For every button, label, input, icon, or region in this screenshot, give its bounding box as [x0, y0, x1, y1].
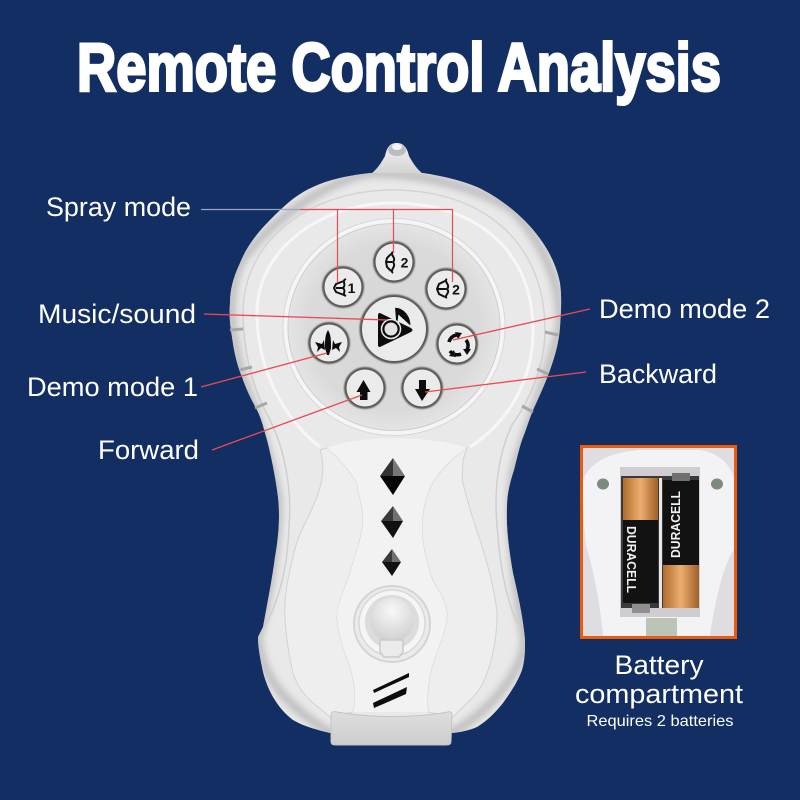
photo: latch [646, 618, 677, 636]
right grip panel [422, 448, 497, 717]
caption line 1: Battery [614, 650, 704, 680]
button: spray 1 [322, 266, 364, 308]
photo: left battery [623, 478, 658, 613]
callout lines: spray mode [201, 210, 452, 282]
callout line: demo mode 1 [201, 353, 327, 387]
battery compartment photo [582, 446, 736, 638]
speed diamonds [380, 458, 405, 576]
photo: right battery: DURACELL [668, 491, 683, 558]
photo: screw hole right [711, 478, 723, 490]
button panel [283, 218, 505, 436]
remote antenna nub [368, 143, 426, 176]
battery caption [575, 650, 744, 730]
button: demo mode 1 [308, 322, 350, 364]
label: demo mode 2: Demo mode 2 [599, 294, 770, 324]
photo: left battery: DURACELL [624, 526, 639, 593]
button: spray 2 centre: 2 [401, 254, 409, 270]
center strip [327, 438, 467, 712]
lower outer contour right [496, 330, 545, 623]
photo: right battery [663, 473, 699, 608]
label: demo mode 1: Demo mode 1 [27, 372, 198, 402]
remote body [230, 173, 561, 733]
callout line: backward [425, 372, 586, 392]
remote control [230, 143, 561, 745]
button: spray 2 right: 2 [452, 282, 460, 298]
button: demo mode 2 [436, 323, 478, 365]
bottom tab [331, 712, 452, 745]
button: backward [401, 367, 443, 409]
joystick [354, 586, 430, 662]
callout line: forward [212, 395, 362, 450]
left grip panel [285, 448, 363, 717]
photo: screw hole left [597, 478, 609, 490]
callout line: demo mode 2 [453, 309, 590, 340]
label: backward: Backward [599, 359, 717, 389]
caption line 3: Requires 2 batteries [586, 713, 734, 730]
photo: compartment [620, 467, 700, 617]
button: music [360, 294, 428, 364]
lower outer contour left [243, 313, 290, 630]
button: spray 2 centre [373, 241, 415, 283]
double slash mark [373, 673, 409, 708]
label: forward: Forward [98, 435, 199, 465]
button: spray 1: 1 [348, 280, 356, 296]
label: music/sound: Music/sound [38, 299, 196, 329]
callout line: music [204, 314, 387, 320]
photo: white casing [583, 450, 734, 636]
body shading [231, 173, 560, 733]
side notches [230, 329, 558, 412]
caption line 2: compartment [575, 679, 744, 709]
photo: orange frame [582, 446, 736, 638]
label: spray mode: Spray mode [46, 192, 191, 222]
head contours [243, 190, 545, 330]
button: forward [344, 367, 386, 409]
button: spray 2 right [425, 268, 467, 310]
